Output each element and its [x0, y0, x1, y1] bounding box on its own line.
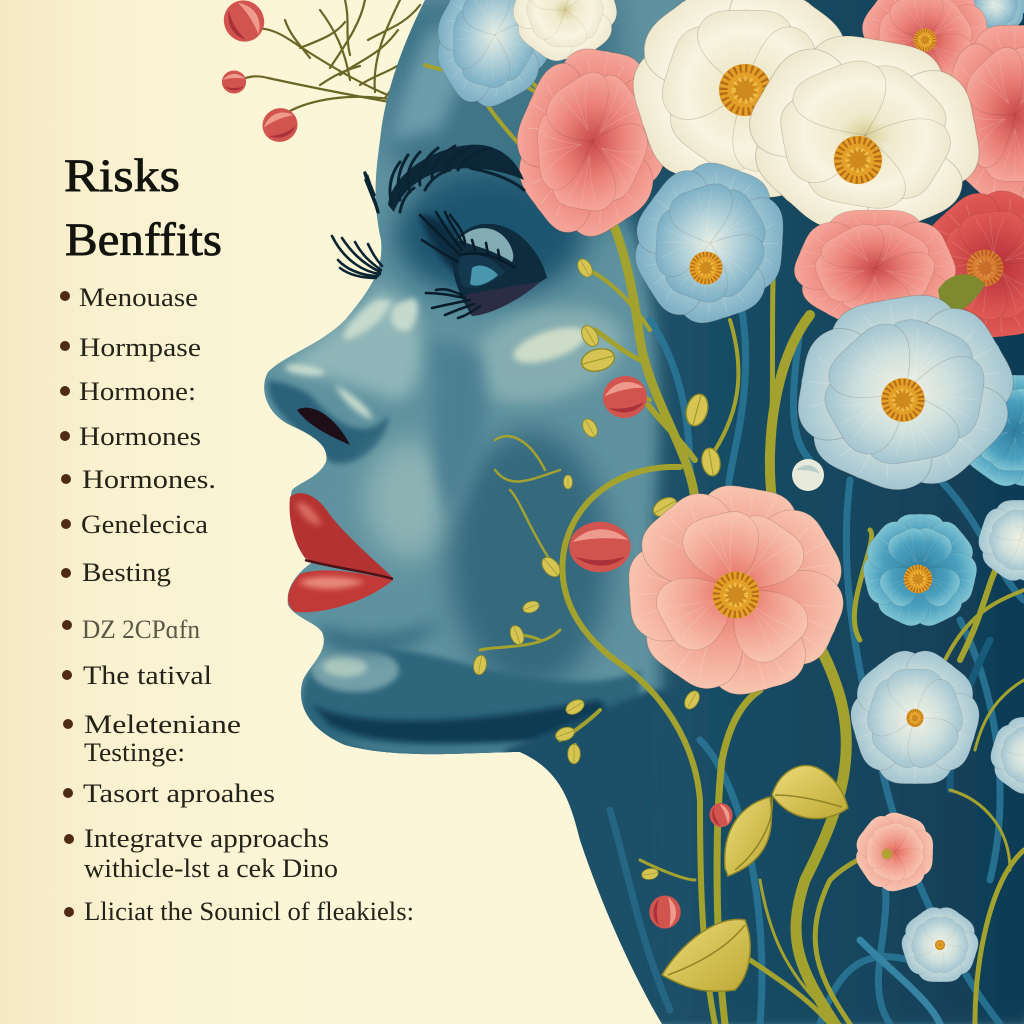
- flower: teal right edge: [953, 375, 1024, 494]
- nostril: [297, 408, 350, 445]
- eye socket outline: [452, 224, 547, 316]
- heading: Risks: [64, 150, 180, 202]
- lower cheek: [365, 440, 455, 560]
- heading: Benffits: [65, 214, 222, 266]
- chin: [302, 648, 640, 760]
- lashes: [420, 212, 515, 318]
- nose bridge light: [280, 285, 422, 400]
- lower lid: [465, 282, 540, 316]
- flower: large white right: [721, 18, 1007, 267]
- jaw shadow: [314, 698, 606, 745]
- eyebrow: [388, 145, 524, 212]
- portrait: face and neck: [250, 0, 1024, 1024]
- bud: top-left red buds: [216, 0, 302, 147]
- flower: white blue lower: [845, 642, 985, 784]
- text column: [60, 150, 414, 926]
- eye-side contour: [430, 340, 487, 520]
- bullet list: Hormpase: [79, 333, 201, 362]
- forehead shading: [380, 0, 620, 230]
- flower: white right edge: [975, 500, 1024, 586]
- cheek highlight: [511, 324, 586, 366]
- bullet list: Meleteniane: [84, 710, 241, 739]
- iris: [458, 254, 505, 288]
- bullet list: Integratve approachs: [84, 824, 329, 853]
- yellow flower buds: [472, 256, 722, 881]
- flower: light blue: [602, 142, 813, 356]
- bullet list: [60, 283, 414, 926]
- bullet list: Genelecica: [81, 510, 209, 539]
- neck: [505, 690, 1024, 1024]
- bullet list: DZ 2CPɑfn: [82, 615, 200, 644]
- bullet list: Hormone:: [79, 377, 196, 406]
- bullet list: Lliciat the Sounicl of fleakiels:: [84, 897, 414, 926]
- lips: [288, 493, 393, 612]
- nose underside: [268, 380, 388, 463]
- lash shadow: [420, 215, 460, 275]
- forehead highlight: [390, 22, 461, 144]
- jaw edge: [344, 739, 528, 756]
- flower: coral far right: [936, 25, 1024, 219]
- heading: [64, 150, 222, 266]
- bullet list: Menouase: [79, 283, 198, 312]
- bullet list: The tatival: [83, 661, 212, 690]
- flower: pink top right: [834, 0, 1012, 132]
- flower: white lower right edge: [987, 717, 1024, 799]
- hair streaks: [610, 300, 1024, 1024]
- flower: peach large: [603, 469, 868, 722]
- lip line: [305, 560, 393, 579]
- flower: small white: [881, 890, 996, 1004]
- flower: pink middle: [786, 210, 964, 335]
- bullet list: withicle-lst a cek Dino: [84, 854, 338, 883]
- yellow leaves: [662, 766, 848, 991]
- chin crease below lips: [320, 620, 440, 652]
- hair mass: [625, 0, 1024, 1024]
- flower: blue white large: [771, 279, 1024, 520]
- bullet list: Testinge:: [84, 738, 185, 767]
- cheek light: [472, 300, 628, 409]
- flower: coral left: [493, 37, 688, 261]
- red and white buds: [569, 372, 824, 928]
- stems and vines: [425, 60, 1024, 1024]
- upper lip: [290, 493, 393, 578]
- upper lid: [458, 228, 513, 262]
- lower lip: [288, 570, 393, 612]
- flower: large white: [622, 0, 868, 198]
- bullet list: Tasort aproahes: [83, 779, 275, 808]
- bullet list: Besting: [82, 558, 171, 587]
- outer eyelashes: [332, 173, 382, 278]
- leaf: green sepal: [938, 274, 985, 314]
- flower: pale blue top: [414, 0, 573, 129]
- bullet list: Hormones: [79, 422, 201, 451]
- bullet list: Hormones.: [82, 465, 216, 494]
- eye: [420, 212, 547, 318]
- flower: red right: [883, 162, 1024, 378]
- nose highlights: [284, 298, 418, 420]
- eye socket shadow: [395, 173, 585, 297]
- flower: pale blue corner: [961, 0, 1024, 40]
- flower: teal: [860, 514, 980, 632]
- twig branches top left: [240, 0, 422, 112]
- flower: small pink: [839, 802, 949, 908]
- flower: white top: [508, 0, 622, 68]
